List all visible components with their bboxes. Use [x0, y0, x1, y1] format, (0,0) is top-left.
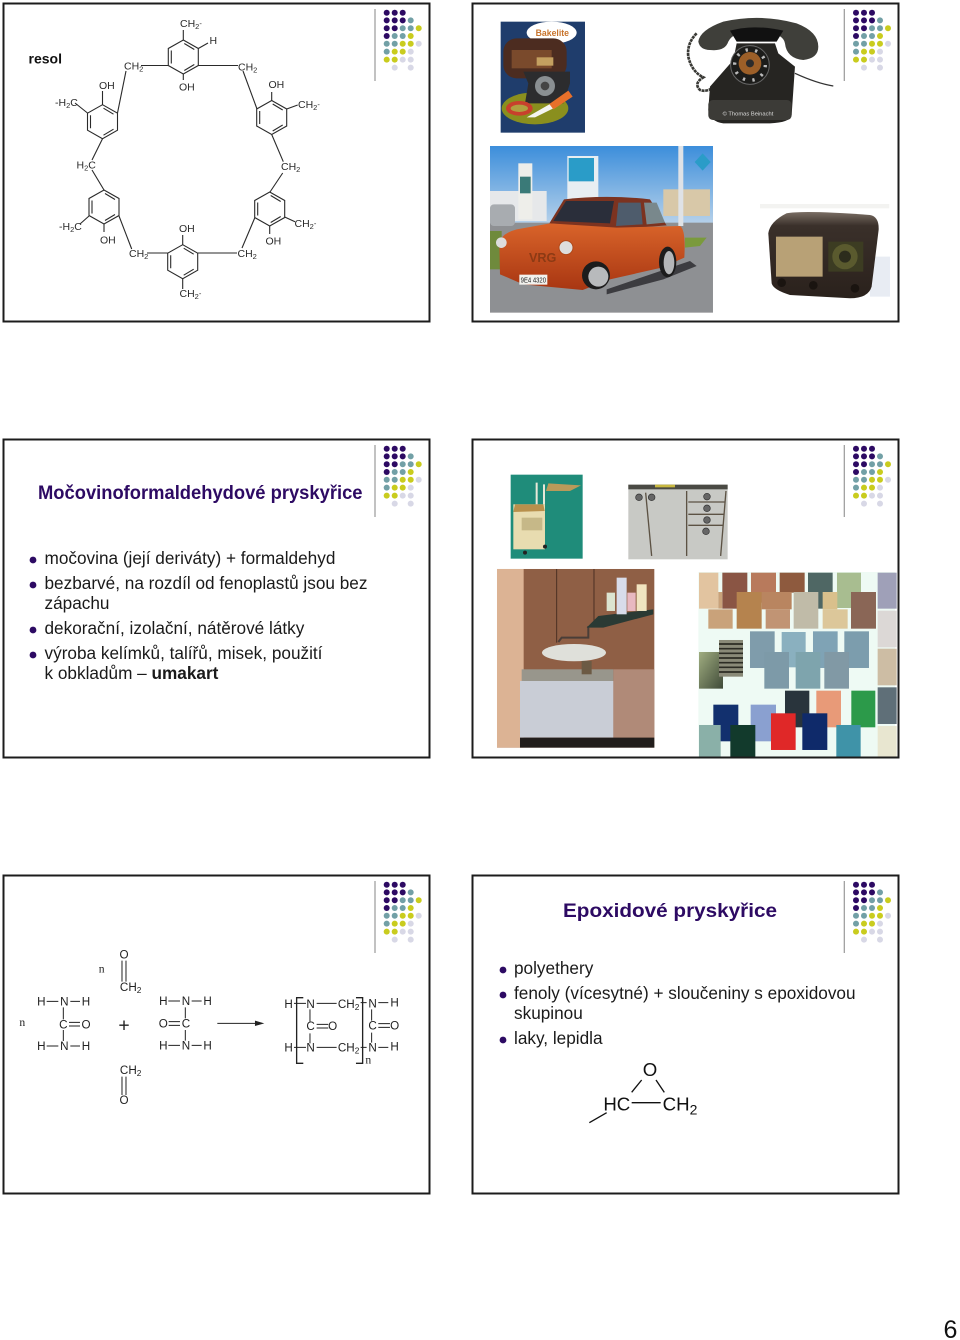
reactant: formaldehyde molecules: O — [119, 1094, 129, 1107]
panel: reaction slide — [4, 876, 430, 1194]
product: polymer: 2 — [355, 1046, 360, 1056]
panel: laminate applications slide — [472, 440, 898, 759]
reactant: urea molecule 1: N — [60, 1040, 69, 1053]
chart: resol structural formula — [55, 18, 320, 301]
chart: resol structural formula: CH — [298, 99, 313, 111]
product: polymer — [284, 997, 399, 1066]
icon: decorative dot grid, applications slide — [844, 445, 891, 517]
image: orange Trabant car at petrol station: 9E4 4320 — [521, 278, 546, 285]
chart: epoxide group formula — [589, 1059, 698, 1123]
heading: epoxy resins: Epoxidové pryskyřice — [563, 900, 777, 922]
chart: resol structural formula: CH — [124, 60, 139, 72]
panel: urea-formaldehyde resins slide — [4, 440, 430, 758]
chart: resol structural formula: - — [314, 219, 317, 228]
chart: resol structural formula: 2 — [84, 164, 88, 172]
chart: resol structural formula: 2 — [195, 292, 199, 301]
reactant: urea molecule 2: H — [159, 995, 168, 1008]
image: kitchen cabinet — [628, 485, 728, 559]
product: polymer: O — [328, 1020, 337, 1033]
icon: decorative dot grid, products slide — [844, 9, 891, 81]
image: washbasin with laminate wall — [497, 569, 654, 748]
product: polymer: 2 — [355, 1002, 360, 1012]
chart: resol structural formula: - — [199, 19, 202, 28]
chart: resol structural formula: 2 — [70, 225, 74, 234]
chart: epoxide group formula: 2 — [690, 1101, 698, 1117]
reactant: formaldehyde molecules: n — [99, 962, 105, 975]
chart: resol structural formula: 2 — [253, 252, 257, 261]
chart: resol structural formula: CH — [294, 218, 310, 230]
arrow: reaction direction — [217, 1021, 264, 1026]
reactant: formaldehyde molecules: 2 — [137, 985, 142, 995]
chart: resol structural formula: CH — [238, 248, 253, 260]
chart: resol structural formula: C — [70, 97, 78, 109]
panel: resol slide — [4, 4, 430, 322]
text block: bullet list: zápachu — [44, 593, 109, 613]
product: polymer: H — [390, 997, 399, 1010]
chart: resol structural formula: H — [76, 160, 84, 172]
product: polymer: H — [284, 1042, 293, 1055]
chart: resol structural formula: 2 — [144, 252, 148, 261]
heading: urea-formaldehyde resins: Močovinoformaldehydové pryskyřice — [38, 482, 363, 504]
product: polymer: H — [390, 1041, 399, 1054]
chart: resol structural formula: 2 — [139, 64, 143, 74]
reactant: urea molecule 1: H — [37, 995, 46, 1008]
chart: resol structural formula: CH — [180, 18, 195, 30]
text block: epoxy bullet list: polyethery — [514, 958, 594, 978]
chart: urea-formaldehyde reaction scheme — [19, 948, 399, 1107]
reactant: urea molecule 1 — [19, 995, 91, 1053]
chart: resol structural formula: 2 — [66, 101, 70, 110]
image: Bakelite poster — [501, 22, 585, 133]
panel: epoxy resins slide — [472, 876, 898, 1194]
chart: resol structural formula: 2 — [195, 22, 199, 31]
reactant: formaldehyde molecules: CH — [120, 981, 137, 994]
image: laminate decor samples — [698, 572, 897, 759]
icon: decorative dot grid, epoxy slide — [844, 881, 891, 953]
chart: resol structural formula: C — [88, 160, 96, 172]
text block: bullet list: močovina (její deriváty) + formaldehyd — [44, 548, 335, 568]
symbol: plus: + — [118, 1016, 130, 1037]
chart: resol structural formula: -H — [59, 221, 70, 233]
product: polymer: H — [284, 998, 293, 1011]
chart: epoxide group formula: O — [643, 1059, 657, 1080]
chart: resol structural formula: OH — [266, 236, 281, 248]
product: polymer: CH — [338, 1042, 355, 1055]
chart: epoxide group formula: CH — [663, 1093, 690, 1114]
reactant: urea molecule 2: H — [203, 1039, 212, 1052]
chart: resol structural formula: H — [210, 35, 217, 47]
reactant: urea molecule 2: O — [159, 1018, 168, 1031]
product: polymer: CH — [338, 998, 355, 1011]
reactant: urea molecule 2: N — [182, 1039, 190, 1052]
reactant: urea molecule 1: H — [37, 1040, 46, 1053]
image: orange Trabant car at petrol station — [490, 146, 713, 313]
text block: epoxy bullet list: laky, lepidla — [514, 1028, 603, 1048]
reactant: urea molecule 1: H — [82, 995, 90, 1008]
text block: bullet list: bezbarvé, na rozdíl od fenoplastů jsou bez — [44, 573, 367, 593]
image: Bakelite poster: Bakelite — [536, 28, 569, 38]
text block: bullet list: dekorační, izolační, nátěrové látky — [44, 618, 305, 638]
chart: resol structural formula: OH — [100, 234, 116, 246]
text block: epoxy bullet list: fenoly (vícesytné) + sloučeniny s epoxidovou — [514, 983, 856, 1003]
product: polymer: C — [368, 1019, 377, 1032]
reactant: urea molecule 2 — [159, 995, 212, 1052]
chart: resol structural formula: 2 — [313, 103, 317, 112]
chart: resol structural formula: C — [74, 221, 82, 233]
icon: decorative dot grid, urea slide — [375, 445, 422, 517]
product: polymer: N — [306, 1042, 315, 1055]
chart: resol structural formula: CH — [180, 288, 195, 300]
reactant: urea molecule 2: C — [182, 1018, 190, 1031]
reactant: formaldehyde molecules: O — [119, 948, 129, 961]
product: polymer: C — [306, 1020, 315, 1033]
product: polymer: O — [390, 1019, 399, 1032]
reactant: urea molecule 1: C — [59, 1018, 68, 1031]
icon: decorative dot grid, reaction slide — [375, 881, 422, 953]
chart: resol structural formula: 2 — [296, 165, 300, 174]
chart: resol structural formula: CH — [281, 161, 296, 173]
reactant: urea molecule 2: H — [159, 1039, 168, 1052]
reactant: urea molecule 1: O — [81, 1018, 91, 1031]
chart: resol structural formula: - — [199, 289, 202, 298]
product: polymer: N — [368, 997, 377, 1010]
chart: resol structural formula: OH — [179, 223, 195, 235]
chart: resol structural formula: OH — [99, 80, 115, 92]
image: orange Trabant car at petrol station: VRG — [529, 251, 557, 265]
text block: epoxy bullet list: skupinou — [514, 1003, 583, 1023]
chart: resol structural formula: -H — [55, 97, 66, 109]
text block: bullet list: výroba kelímků, talířů, misek, použití — [44, 643, 323, 663]
product: polymer: N — [368, 1042, 377, 1055]
text block: bullet list — [30, 548, 367, 683]
product: polymer: n — [365, 1053, 371, 1066]
reactant: urea molecule 1: H — [82, 1040, 90, 1053]
chart: epoxide group formula: HC — [603, 1093, 630, 1114]
chart: resol structural formula: OH — [179, 82, 195, 94]
chart: resol structural formula: 2 — [253, 66, 257, 74]
text block: bullet list: k obkladům – umakart — [44, 663, 219, 683]
reactant: formaldehyde molecules: CH — [120, 1064, 137, 1077]
image: black bakelite telephone: © Thomas Beinacht — [723, 110, 774, 117]
heading: resol: resol — [28, 50, 62, 66]
chart: resol structural formula: CH — [129, 248, 144, 260]
image: black bakelite telephone — [688, 18, 833, 123]
reactant: formaldehyde molecules: 2 — [137, 1068, 142, 1078]
panel: bakelite products slide — [472, 4, 898, 322]
icon: decorative dot grid, resol slide — [375, 9, 422, 81]
image: bakelite valve radio — [760, 204, 890, 298]
reactant: urea molecule 1: N — [60, 995, 69, 1008]
text block: epoxy bullet list — [500, 958, 856, 1048]
reactant: urea molecule 1: n — [19, 1016, 25, 1029]
chart: resol structural formula: CH — [238, 62, 253, 74]
chart: resol structural formula: OH — [268, 79, 284, 91]
reactant: formaldehyde molecules — [99, 948, 142, 1107]
image: hospital bedside table — [511, 475, 583, 559]
reactant: urea molecule 2: H — [203, 995, 212, 1008]
product: polymer: N — [306, 998, 315, 1011]
chart: resol structural formula: - — [317, 100, 320, 109]
reactant: urea molecule 2: N — [182, 995, 190, 1008]
chart: resol structural formula: 2 — [310, 222, 314, 231]
